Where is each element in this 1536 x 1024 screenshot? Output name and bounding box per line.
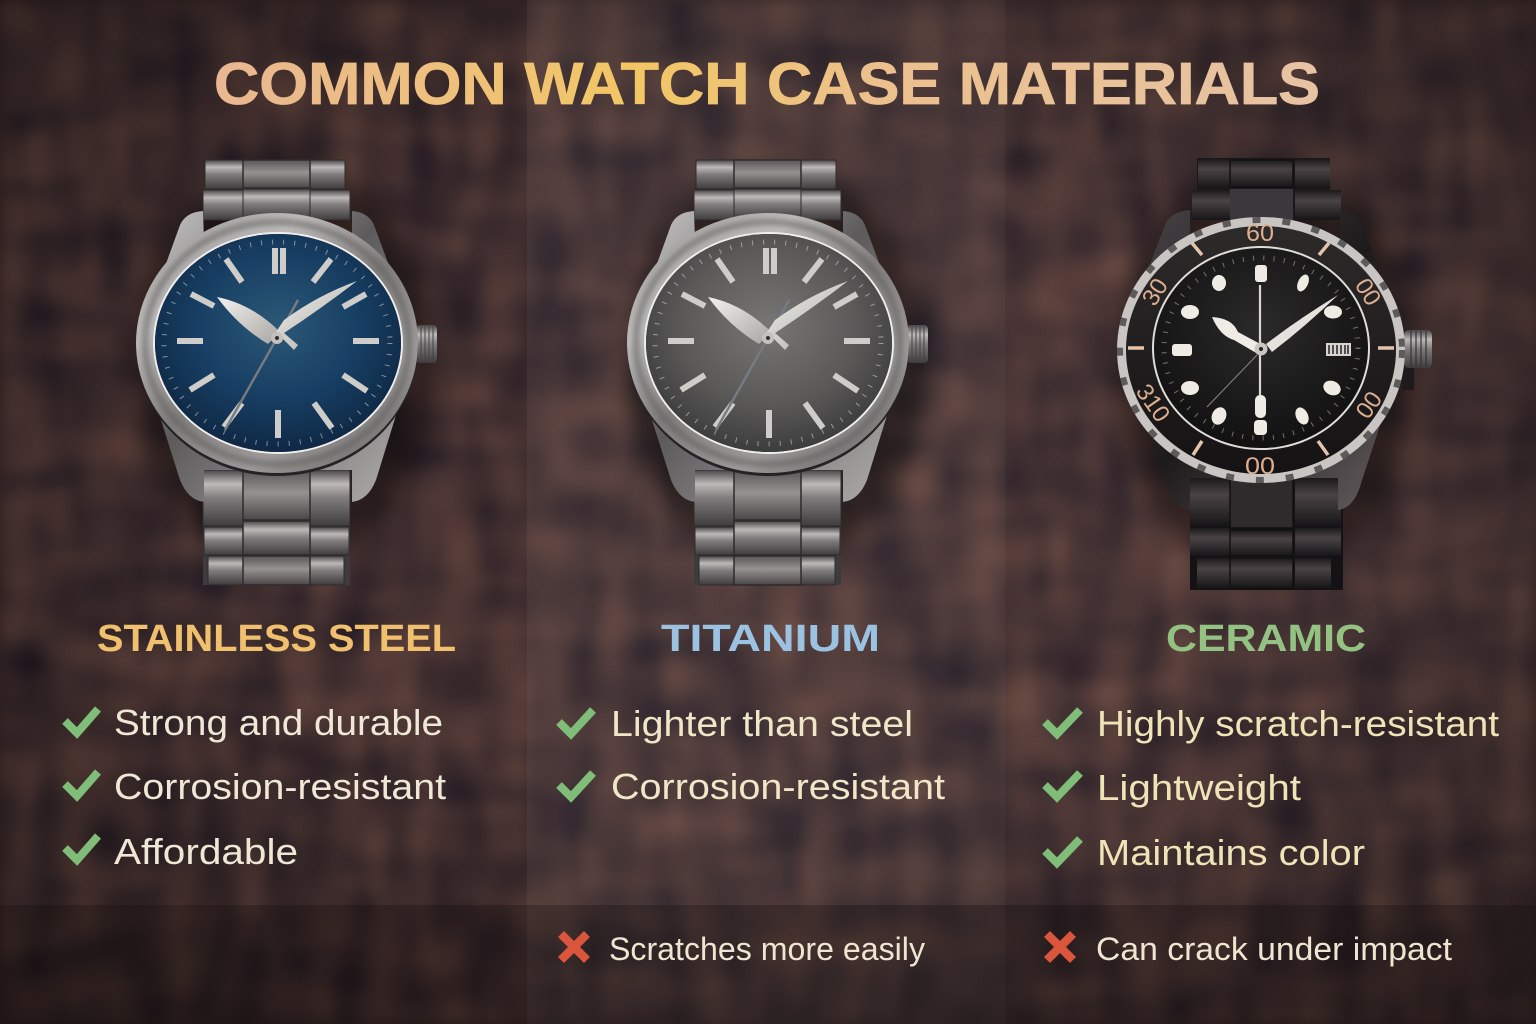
heading: stainless steel: STAINLESS STEEL bbox=[97, 618, 456, 660]
pros list: ceramic: Maintains color bbox=[1097, 832, 1365, 873]
heading: ceramic: CERAMIC bbox=[1166, 618, 1366, 660]
pros list: stainless steel: Strong and durable bbox=[114, 702, 443, 743]
bezel numerals: 00 bbox=[1351, 387, 1388, 424]
panel: ceramic bbox=[1045, 158, 1499, 967]
bezel numerals: 310 bbox=[1130, 379, 1175, 427]
heading: titanium: TITANIUM bbox=[661, 618, 880, 660]
hands bbox=[1259, 285, 1261, 395]
panel: titanium bbox=[559, 160, 945, 967]
con: can crack under impact: Can crack under impact bbox=[1096, 931, 1452, 967]
date window bbox=[1326, 343, 1351, 356]
bezel numerals: 00 bbox=[1245, 453, 1275, 480]
bezel numerals: 60 bbox=[1246, 220, 1274, 247]
bezel markers bbox=[1128, 243, 1394, 455]
pros list: stainless steel: Affordable bbox=[114, 831, 298, 872]
pros list: ceramic: Highly scratch-resistant bbox=[1097, 703, 1499, 744]
bezel numerals bbox=[1130, 220, 1388, 480]
panel: stainless steel bbox=[65, 160, 456, 872]
pros list: titanium bbox=[559, 703, 945, 807]
pros list: ceramic bbox=[1045, 703, 1499, 873]
pros list: titanium: Corrosion-resistant bbox=[611, 766, 945, 807]
watch: stainless steel with blue dial bbox=[135, 160, 437, 585]
bezel numerals: 30 bbox=[1137, 274, 1174, 311]
watch: black ceramic diver bbox=[1117, 158, 1432, 590]
pros list: ceramic: Lightweight bbox=[1097, 767, 1301, 808]
dial lume markers bbox=[1172, 265, 1343, 435]
watch: titanium with grey dial bbox=[626, 160, 928, 585]
pros list: stainless steel bbox=[65, 702, 446, 872]
bezel numerals: 00 bbox=[1349, 274, 1386, 311]
pros list: titanium: Lighter than steel bbox=[611, 703, 913, 744]
title: COMMON WATCH CASE MATERIALS bbox=[214, 51, 1320, 117]
pros list: stainless steel: Corrosion-resistant bbox=[114, 766, 446, 807]
con: scratches more easily: Scratches more easily bbox=[609, 931, 925, 967]
